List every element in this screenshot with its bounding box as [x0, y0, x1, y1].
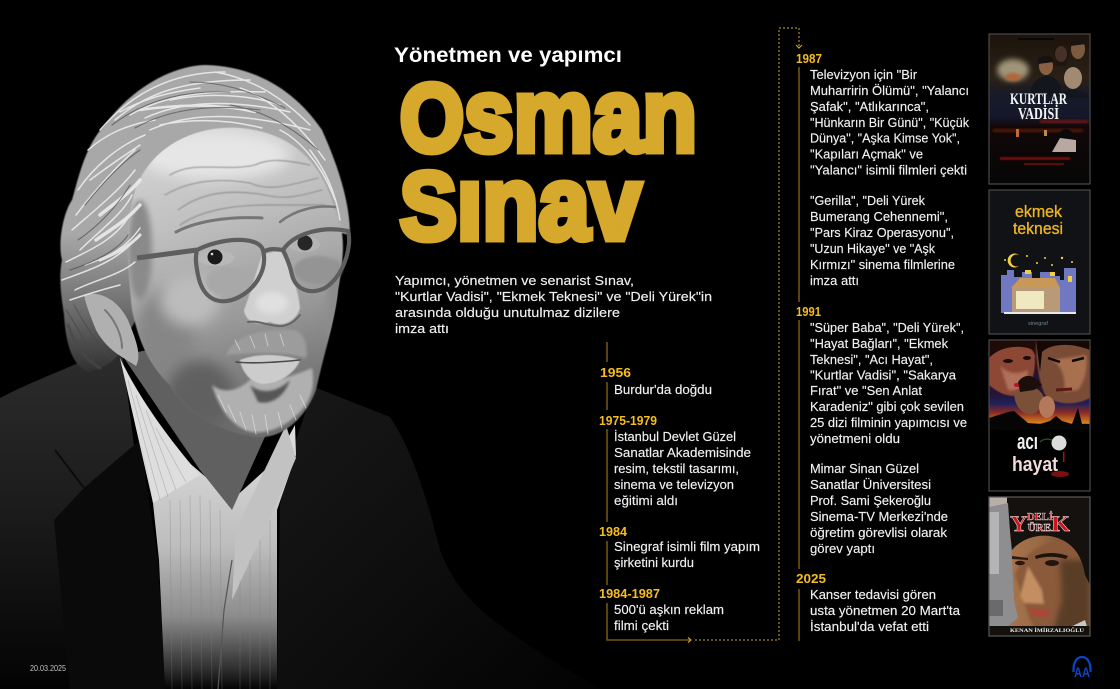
year 1987: "Hünkarın Bir Günü", "Küçük: [810, 115, 969, 130]
forehead wrinkles: [165, 160, 325, 225]
years 1984-1987: 1984-1987: [599, 586, 660, 601]
year 1991: [796, 304, 967, 569]
eyes: [198, 236, 342, 297]
year 2025: İstanbul'da vefat etti: [810, 619, 929, 634]
connector arrow between columns: [688, 28, 802, 642]
years 1984-1987: [599, 586, 724, 640]
years 1975-1979: [599, 413, 751, 522]
shirt: [120, 358, 296, 689]
year 1956: [600, 365, 712, 410]
nose: [244, 250, 300, 326]
hair strands: [62, 72, 340, 300]
hair back: [60, 65, 350, 372]
year 1991: "Kurtlar Vadisi", "Sakarya: [810, 368, 957, 382]
intro paragraph: Yapımcı, yönetmen ve senarist Sınav,: [395, 273, 634, 288]
year 1987: [796, 51, 969, 302]
year 1991: öğretim görevlisi olarak: [810, 525, 948, 540]
date: 20.03.2025: [30, 663, 66, 673]
year 1987: Dünya", "Aşka Kimse Yok",: [810, 130, 960, 146]
year 1991: "Süper Baba", "Deli Yürek",: [810, 320, 964, 335]
year 1991: Teknesi", "Acı Hayat",: [810, 352, 933, 367]
intro paragraph: [395, 273, 712, 336]
year 1987: Televizyon için "Bir: [810, 67, 918, 82]
subtitle: Yönetmen ve yapımcı: [394, 44, 622, 67]
moustache and beard: [212, 330, 313, 434]
year 1956: 1956: [600, 365, 631, 380]
years 1975-1979: sinema ve televizyon: [614, 477, 734, 492]
year 1984: Sinegraf isimli film yapım: [614, 539, 760, 554]
poster: Deli Yürek: [989, 497, 1090, 636]
portrait photo of Osman Sınav: [0, 65, 600, 689]
eyebrows: [176, 207, 335, 232]
timeline column 2: [796, 51, 969, 641]
year 1987: Muharririn Ölümü", "Yalancı: [810, 83, 969, 98]
title: Osman: Osman: [400, 58, 697, 174]
year 2025: [796, 571, 961, 641]
year 1987: Şafak", "Atlıkarınca",: [810, 99, 929, 114]
year 1987: "Kapıları Açmak" ve: [810, 146, 923, 162]
face: [128, 128, 343, 437]
year 2025: usta yönetmen 20 Mart'ta: [810, 603, 961, 618]
poster: Kurtlar Vadisi: KURTLAR: [1010, 91, 1067, 108]
year 1984: 1984: [599, 524, 628, 539]
poster: Kurtlar Vadisi: [989, 34, 1090, 184]
poster: Acı Hayat: [989, 340, 1090, 491]
years 1984-1987: filmi çekti: [614, 618, 669, 633]
face shading: [128, 131, 343, 429]
year 1991: yönetmeni oldu: [810, 431, 900, 446]
year 1991: Mimar Sinan Güzel: [810, 461, 919, 476]
logo: Anadolu Agency: [1073, 657, 1091, 680]
poster: Kurtlar Vadisi: VADİSİ: [1018, 104, 1059, 123]
year 1987: Kırmızı" sinema filmlerine: [810, 257, 955, 272]
years 1975-1979: İstanbul Devlet Güzel: [614, 429, 736, 444]
timeline column 1: [599, 342, 760, 640]
year 1987: "Gerilla", "Deli Yürek: [810, 193, 925, 208]
dark hair strands: [66, 82, 318, 368]
years 1975-1979: Sanatlar Akademisinde: [614, 445, 751, 460]
poster: Deli Yürek: DELİ: [1027, 511, 1053, 523]
icon: night city and bakery: [1001, 268, 1076, 314]
poster: Deli Yürek: YÜREK: [1010, 511, 1070, 536]
poster: Acı Hayat: hayat: [1012, 454, 1058, 476]
year 1991: 25 dizi filminin yapımcısı ve: [810, 415, 967, 430]
year 1984: şirketini kurdu: [614, 555, 694, 570]
years 1975-1979: resim, tekstil tasarımı,: [614, 461, 739, 476]
year 1991: Sinema-TV Merkezi'nde: [810, 509, 948, 524]
poster: Ekmek Teknesi: teknesi: [1013, 219, 1063, 238]
year 1991: Fırat" ve "Sen Anlat: [810, 383, 922, 398]
ear: [84, 294, 138, 366]
poster: Ekmek Teknesi: sinegraf: [1028, 321, 1049, 327]
year 1991: görev yaptı: [810, 541, 875, 556]
year 1991: Sanatlar Üniversitesi: [810, 477, 931, 492]
year 1991: Prof. Sami Şekeroğlu: [810, 493, 931, 508]
intro paragraph: imza attı: [395, 321, 449, 336]
year 1991: Karadeniz" gibi çok sevilen: [810, 399, 964, 414]
neck: [122, 340, 286, 510]
poster: Acı Hayat: acı: [1017, 429, 1038, 454]
jacket: [0, 352, 600, 689]
poster: Deli Yürek: KENAN İMİRZALIOĞLU: [1010, 628, 1084, 634]
year 2025: 2025: [796, 571, 826, 586]
poster: Ekmek Teknesi: [989, 190, 1090, 334]
year 1987: Bumerang Cehennemi",: [810, 209, 948, 224]
intro paragraph: arasında olduğu unutulmaz dizilere: [395, 305, 620, 320]
year 1987: "Uzun Hikaye" ve "Aşk: [810, 241, 935, 256]
years 1975-1979: 1975-1979: [599, 413, 657, 428]
year 1987: "Yalancı" isimli filmleri çekti: [810, 162, 967, 178]
glasses: [137, 229, 349, 301]
year 1987: 1987: [796, 51, 822, 66]
year 1991: "Hayat Bağları", "Ekmek: [810, 336, 948, 351]
year 1987: "Pars Kiraz Operasyonu",: [810, 225, 954, 240]
logo: Anadolu Agency: AA: [1074, 664, 1090, 680]
years 1984-1987: 500'ü aşkın reklam: [614, 602, 724, 617]
year 1991: 1991: [796, 304, 821, 319]
year 1987: imza attı: [810, 273, 859, 288]
year 1984: [599, 524, 760, 585]
poster: Ekmek Teknesi: ekmek: [1015, 202, 1062, 221]
year 2025: Kanser tedavisi gören: [810, 587, 936, 602]
title: Sınav: Sınav: [400, 146, 641, 262]
year 1956: Burdur'da doğdu: [614, 382, 712, 397]
years 1975-1979: eğitimi aldı: [614, 493, 678, 508]
intro paragraph: "Kurtlar Vadisi", "Ekmek Teknesi" ve "Deli Yürek"in: [395, 289, 712, 304]
icon: moon and stars: [1004, 254, 1073, 268]
